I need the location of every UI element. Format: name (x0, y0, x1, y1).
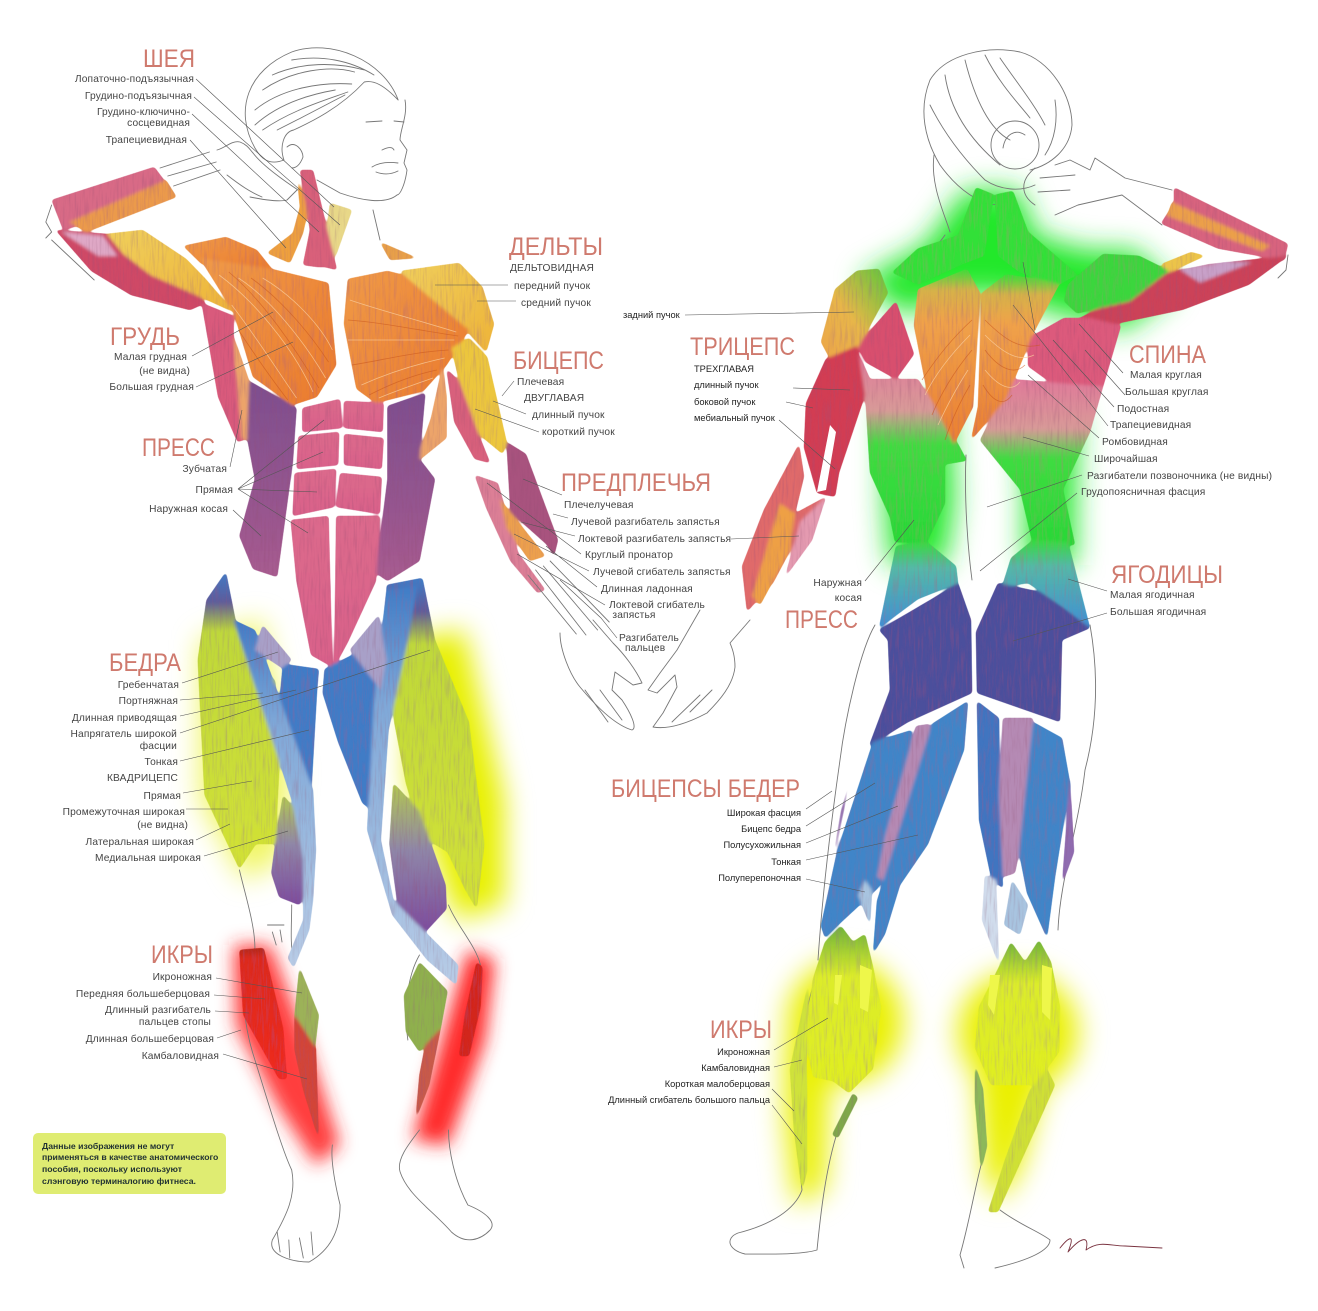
labels: abs muscles: Зубчатая (182, 463, 227, 475)
labels: biceps parts (517, 377, 615, 438)
labels: back muscles: Малая круглая (1130, 370, 1202, 381)
muscle: triceps (804, 346, 865, 497)
labels: back muscles: Большая круглая (1125, 387, 1209, 398)
labels: chest muscles: Малая грудная (114, 352, 187, 363)
glow: green back (860, 190, 1175, 565)
labels: forearm muscles: Длинная ладонная (601, 584, 693, 595)
labels: biceps parts: Плечевая (517, 377, 564, 388)
muscle: teres and infraspinatus (857, 301, 1121, 387)
leader lines: back figure (685, 262, 1125, 1144)
labels: back muscles: Трапециевидная (1110, 420, 1191, 431)
labels: biceps parts: ДВУГЛАВАЯ (524, 393, 584, 404)
muscle: calves back (790, 926, 1060, 1212)
heading: triceps: ТРИЦЕПС (690, 333, 795, 361)
muscle: latissimus dorsi (859, 354, 1103, 545)
face and hands: front figure outline (217, 100, 642, 730)
callout: disclaimer note (33, 1133, 226, 1194)
leader lines: front figure (180, 79, 617, 1079)
labels: triceps parts: ТРЕХГЛАВАЯ (694, 364, 754, 374)
muscle: rectus abdominis (291, 399, 384, 667)
labels: forearm muscles: Круглый пронатор (585, 550, 673, 561)
heading: biceps: БИЦЕПС (513, 347, 604, 375)
heading: calves front: ИКРЫ (151, 941, 213, 969)
labels: neck muscles: сосцевидная (127, 118, 190, 129)
labels: hamstring muscles: Полусухожильная (723, 840, 801, 850)
labels: back muscles: Ромбовидная (1102, 436, 1168, 448)
labels: thigh muscles: Промежуточная широкая (63, 807, 185, 818)
labels: calf muscles (608, 1047, 771, 1105)
glow: red on front shins (234, 945, 495, 1165)
labels: forearm muscles: Разгибатель (619, 632, 679, 644)
labels: shin muscles: Икроножная (153, 972, 212, 983)
labels: external oblique back (813, 578, 862, 604)
heading: calves back: ИКРЫ (710, 1016, 772, 1044)
heading: abs front: ПРЕСС (142, 434, 215, 462)
callout: disclaimer note: применяться в качестве анатомического (42, 1152, 218, 1162)
muscle: gluteus medius (879, 540, 1090, 628)
tendons: wrist and raised hand (160, 152, 609, 635)
labels: shin muscles: Передняя большеберцовая (76, 988, 210, 1000)
labels: abs muscles (149, 463, 233, 515)
labels: thigh muscles: Латеральная широкая (86, 837, 194, 848)
labels: deltoid parts: передний пучок (514, 281, 591, 292)
labels: forearm muscles (564, 500, 731, 654)
labels: thigh muscles: Тонкая (145, 757, 178, 768)
labels: neck muscles: Трапециевидная (106, 135, 187, 146)
muscle: trapezius lower (914, 269, 1059, 444)
figure: back view (648, 50, 1288, 1268)
labels: hamstring muscles: Широкая фасция (727, 808, 801, 818)
muscle: deltoids (183, 237, 494, 352)
labels: forearm muscles: Лучевой разгибатель запястья (571, 516, 720, 528)
heading: back: СПИНА (1129, 341, 1206, 369)
muscle: pectorals (200, 258, 469, 405)
muscle: trapezius upper (892, 187, 1077, 285)
muscle: pelvic adductor detail (255, 615, 387, 690)
labels: biceps parts: короткий пучок (542, 427, 615, 438)
labels: thigh muscles: фасции (140, 740, 177, 752)
heading: thighs: БЕДРА (109, 649, 181, 677)
labels: thigh muscles: КВАДРИЦЕПС (107, 773, 178, 784)
labels: thigh muscles: Медиальная широкая (95, 853, 201, 864)
labels: forearm muscles: пальцев (625, 643, 665, 654)
labels: deltoid parts: средний пучок (521, 298, 591, 309)
labels: chest muscles: (не видна) (139, 366, 190, 377)
labels: thigh muscles: Длинная приводящая (72, 713, 177, 724)
callout: disclaimer note: слэнговую терминалогию фитнеса. (42, 1176, 196, 1186)
labels: external oblique back: Наружная (813, 578, 862, 589)
callout: disclaimer note: Данные изображения не могут (42, 1141, 175, 1151)
labels: shin muscles: Длинный разгибатель (105, 1004, 211, 1016)
glow: yellow on front thighs (200, 620, 505, 920)
labels: calf muscles: Икроножная (717, 1047, 770, 1057)
labels: neck muscles: Грудино-подъязычная (85, 91, 192, 102)
labels: chest muscles (109, 352, 194, 393)
muscle: raised arm (52, 167, 234, 312)
labels: neck muscles: Лопаточно-подъязычная (75, 74, 194, 85)
outlines: front figure body (46, 48, 492, 1262)
labels: shin muscles: Камбаловидная (142, 1050, 219, 1062)
labels: back muscles: Широчайшая (1094, 454, 1158, 465)
labels: neck muscles (75, 74, 194, 146)
labels: calf muscles: Длинный сгибатель большого пальца (608, 1095, 771, 1105)
figure: front view (46, 48, 609, 1262)
labels: hamstring muscles: Бицепс бедра (741, 824, 802, 834)
tendon gap in triceps (817, 425, 836, 492)
labels: triceps parts (694, 364, 776, 423)
muscle: sartorius bands (234, 585, 458, 985)
heading: neck: ШЕЯ (143, 45, 195, 73)
labels: back muscles: Разгибатели позвоночника (не видны) (1087, 470, 1272, 482)
labels: glute muscles: Большая ягодичная (1110, 607, 1206, 618)
muscle: gluteus maximus (869, 583, 1090, 746)
heading: hamstrings: БИЦЕПСЫ БЕДЕР (611, 775, 800, 803)
labels: shin muscles: пальцев стопы (139, 1017, 211, 1028)
heading: forearms: ПРЕДПЛЕЧЬЯ (561, 469, 711, 497)
labels: glute muscles (1110, 590, 1206, 618)
labels: thigh muscles: (не видна) (137, 820, 188, 831)
labels: chest muscles: Большая грудная (109, 382, 194, 393)
heading: chest: ГРУДЬ (110, 323, 180, 351)
labels: thigh muscles (63, 679, 201, 864)
labels: calf muscles: Короткая малоберцовая (665, 1079, 770, 1089)
muscle: obliques (239, 381, 435, 581)
muscle: side of torso (202, 303, 447, 463)
muscle: left forearm back (742, 444, 826, 612)
labels: hamstring muscles (718, 808, 802, 883)
labels: back muscles (1081, 370, 1272, 498)
heading: abs back: ПРЕСС (785, 606, 858, 634)
labels: thigh muscles: Прямая (144, 791, 181, 802)
labels: biceps parts: длинный пучок (532, 410, 605, 421)
labels: thigh muscles: Портняжная (119, 696, 178, 707)
labels: thigh muscles: Напрягатель широкой (71, 729, 177, 740)
muscle: right arm (447, 338, 558, 593)
heading: deltoids: ДЕЛЬТЫ (509, 233, 603, 261)
muscle: hamstrings (821, 701, 1074, 965)
labels: glute muscles: Малая ягодичная (1110, 590, 1195, 601)
labels: shin muscles (76, 972, 219, 1062)
callout: disclaimer note: пособия, поскольку используют (42, 1164, 183, 1174)
labels: forearm muscles: Плечелучевая (564, 500, 634, 511)
signature (1060, 1239, 1162, 1252)
labels: hamstring muscles: Тонкая (771, 857, 801, 867)
labels: forearm muscles: Лучевой сгибатель запястья (593, 566, 731, 578)
labels: back muscles: Подостная (1117, 404, 1169, 415)
heading: glutes: ЯГОДИЦЫ (1111, 561, 1223, 589)
labels: abs muscles: Прямая (196, 485, 233, 496)
fibres: back trapezius (922, 320, 1040, 440)
labels: triceps parts: боковой пучок (694, 397, 756, 407)
tendon slits: calf gaps (834, 965, 1052, 1020)
labels: forearm muscles: Локтевой разгибатель запястья (578, 533, 731, 545)
muscle: right arm back (1080, 187, 1288, 328)
labels: shin muscles: Длинная большеберцовая (86, 1033, 214, 1045)
muscle: right thigh (323, 578, 484, 932)
muscle: shins (239, 948, 482, 1140)
labels: neck muscles: Грудино-ключично- (97, 107, 190, 118)
labels: external oblique back: косая (835, 593, 862, 604)
label: rear deltoid: задний пучок (623, 310, 681, 320)
labels: deltoid parts (510, 263, 594, 309)
labels: thigh muscles: Гребенчатая (118, 679, 179, 691)
neck muscles: front figure (267, 170, 417, 270)
labels: forearm muscles: Локтевой сгибатель (609, 599, 705, 611)
labels: triceps parts: длинный пучок (694, 380, 759, 390)
labels: deltoid parts: ДЕЛЬТОВИДНАЯ (510, 263, 594, 274)
muscles: back figure (742, 187, 1288, 1212)
labels: calf muscles: Камбаловидная (701, 1063, 770, 1073)
labels: hamstring muscles: Полуперепоночная (718, 873, 801, 883)
muscle: left thigh (198, 572, 319, 905)
labels: abs muscles: Наружная косая (149, 504, 228, 515)
labels: back muscles: Грудопоясничная фасция (1081, 486, 1205, 498)
outlines: back figure body (648, 50, 1288, 1268)
labels: forearm muscles: запястья (612, 610, 656, 621)
muscle: rear deltoids (821, 254, 1169, 359)
glow: yellow back calves (785, 960, 1078, 1205)
labels: triceps parts: мебиальный пучок (694, 413, 776, 423)
muscles: front figure (52, 167, 558, 1140)
fibres: pectorals (219, 272, 458, 400)
